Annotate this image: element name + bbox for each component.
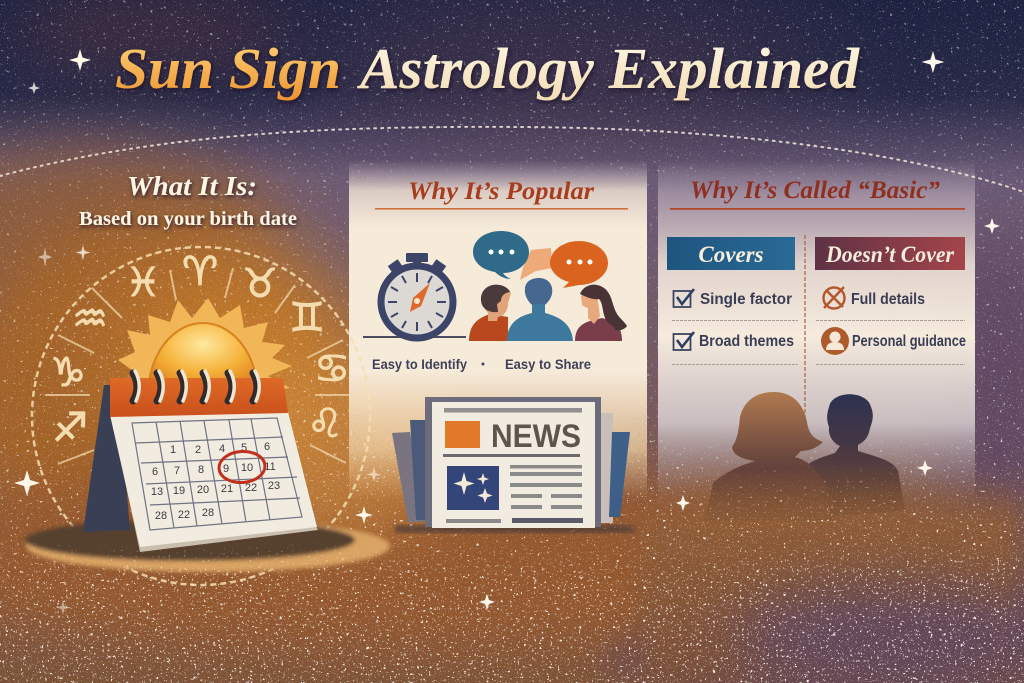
icon: calendar	[83, 371, 318, 552]
zodiac wheel: ♐︎	[52, 405, 88, 451]
calendar dates: 1	[170, 444, 176, 456]
calendar dates: 11	[264, 461, 276, 473]
calendar dates: 6	[264, 441, 270, 453]
calendar dates: 19	[173, 485, 185, 497]
zodiac wheel: ♑︎	[50, 350, 86, 396]
title: Sun Sign	[115, 36, 341, 101]
icon: speech bubbles	[473, 231, 608, 288]
panel: why it's popular background	[349, 160, 647, 500]
calendar dates: 23	[268, 480, 280, 492]
lower right star field	[640, 460, 1024, 683]
column divider	[804, 235, 806, 428]
calendar dates: 28	[202, 507, 214, 519]
item: full details: Full details	[851, 291, 925, 308]
covers column	[667, 237, 798, 364]
calendar dates: 13	[151, 486, 163, 498]
zodiac wheel: ♊︎	[289, 295, 325, 341]
zodiac wheel	[32, 247, 370, 585]
zodiac wheel: ♈︎	[182, 249, 218, 295]
calendar dates: 4	[219, 443, 225, 455]
label: easy to identify and share: Easy to Identify	[372, 356, 467, 372]
icon: newspaper	[392, 397, 635, 533]
doesn't cover column	[815, 237, 966, 364]
dust fade over bottom	[640, 466, 1024, 683]
lower right purple haze	[730, 585, 1024, 683]
heading: what it is: Based on your birth date	[79, 208, 297, 230]
ground disc	[25, 519, 390, 572]
calendar dates: 22	[178, 509, 190, 521]
dotted arc	[0, 127, 1024, 192]
calendar dates: 6	[152, 466, 158, 478]
item: full details	[824, 287, 925, 308]
calendar dates	[151, 441, 280, 522]
label: easy to identify and share: Easy to Share	[505, 356, 591, 372]
zodiac wheel: ♓︎	[125, 260, 161, 306]
heading: why it's popular: Why It’s Popular	[408, 178, 594, 205]
calendar dates: 20	[197, 484, 209, 496]
zodiac wheel: ♉︎	[242, 261, 278, 307]
item: personal guidance: Personal guidance	[852, 333, 966, 350]
panel: why it's called basic background	[658, 160, 975, 510]
calendar grid	[132, 418, 302, 530]
icon: sun	[118, 298, 292, 395]
zodiac wheel: ♒︎	[72, 296, 108, 342]
calendar dates: 28	[155, 510, 167, 522]
calendar dates: 9	[223, 463, 229, 475]
calendar rings	[133, 371, 259, 401]
calendar dates: 8	[198, 464, 204, 476]
heading: why it's called basic: Why It’s Called “Basic”	[690, 177, 940, 204]
calendar dates: 21	[221, 483, 233, 495]
red date circle	[218, 450, 266, 484]
bottom star dust	[0, 540, 1024, 683]
item: broad themes: Broad themes	[699, 333, 794, 350]
calendar dates: 10	[241, 462, 253, 474]
zodiac wheel: ♋︎	[314, 346, 350, 392]
zodiac wheel: ♌︎	[307, 401, 343, 447]
heading: what it is: What It Is:	[127, 171, 257, 201]
icon: three people talking	[469, 278, 627, 341]
label: easy to identify and share	[372, 356, 591, 372]
covers column: Covers	[698, 242, 764, 267]
silhouette: woman and man	[705, 392, 905, 520]
title: Astrology Explained	[357, 36, 860, 101]
heading: what it is	[79, 171, 297, 230]
item: personal guidance	[821, 327, 966, 355]
calendar dates: 22	[245, 482, 257, 494]
calendar dates: 2	[195, 444, 201, 456]
sparkle stars	[14, 49, 1000, 615]
calendar dates: 7	[174, 465, 180, 477]
icon: stopwatch	[363, 253, 466, 338]
item: single factor: Single factor	[700, 291, 792, 308]
icon: newspaper: NEWS	[491, 418, 581, 454]
doesn't cover column: Doesn’t Cover	[825, 242, 955, 267]
calendar dates: 5	[241, 442, 247, 454]
title	[115, 36, 860, 101]
